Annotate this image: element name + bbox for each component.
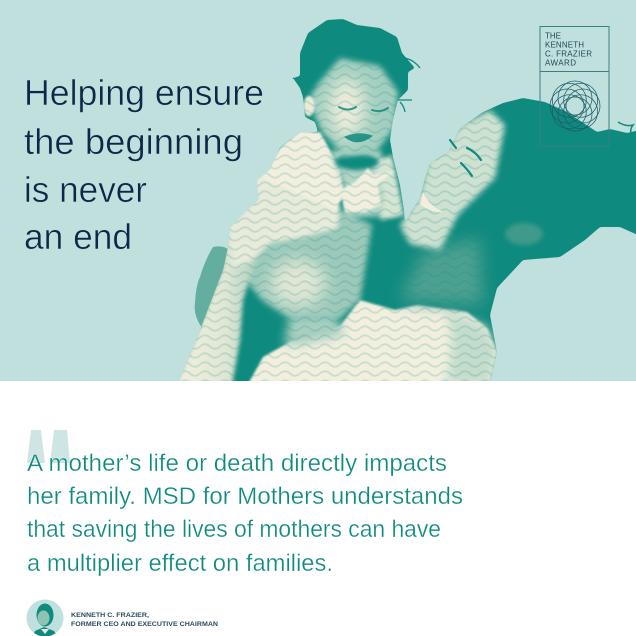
mother's face bbox=[400, 110, 505, 250]
baby's face bbox=[308, 58, 398, 156]
mother's smile and teeth bbox=[420, 192, 443, 212]
avatar background bbox=[26, 600, 64, 636]
wavy halftone texture bbox=[180, 45, 510, 385]
badge line 1: THE bbox=[545, 32, 561, 40]
title line 3: is never bbox=[24, 169, 147, 210]
award badge bbox=[540, 26, 609, 146]
baby's hair strands bbox=[293, 58, 420, 112]
baby's shirt bbox=[262, 131, 345, 210]
icon: spirograph ring bbox=[550, 81, 600, 131]
baby's shirt middle bbox=[330, 150, 398, 218]
baby's sleeve and upper arm bbox=[228, 168, 340, 268]
baby's neck shadow bbox=[335, 154, 379, 170]
baby's shirt right side bbox=[372, 155, 404, 220]
mother and baby figures bbox=[170, 0, 636, 385]
title line 2: the beginning bbox=[24, 121, 243, 162]
attribution role: FORMER CEO AND EXECUTIVE CHAIRMAN bbox=[71, 621, 218, 628]
baby's ear bbox=[304, 96, 314, 116]
quote line 2: her family. MSD for Mothers understands bbox=[27, 483, 463, 510]
title line 1: Helping ensure bbox=[24, 72, 264, 113]
hero background panel bbox=[0, 0, 636, 381]
mother's neck bbox=[400, 238, 483, 305]
avatar head bbox=[36, 604, 54, 626]
mother's chest bbox=[248, 300, 497, 384]
baby's leg behind mother's arm bbox=[195, 246, 228, 328]
badge text bbox=[545, 32, 592, 68]
quote line 4: a multiplier effect on families. bbox=[27, 550, 333, 577]
mother's chest right shading bbox=[445, 312, 497, 384]
mother's raised arm bbox=[179, 226, 260, 381]
silhouette fill bbox=[170, 0, 636, 385]
quote line 3: that saving the lives of mothers can have bbox=[27, 516, 441, 543]
baby's face highlight bbox=[329, 78, 365, 138]
badge line 4: AWARD bbox=[545, 58, 576, 68]
baby's thigh bbox=[284, 314, 345, 345]
badge line 2: KENNETH bbox=[545, 40, 584, 50]
quote line 1: A mother’s life or death directly impacts bbox=[27, 450, 447, 477]
mother's eyes and brow bbox=[450, 140, 481, 176]
quote mark bbox=[27, 430, 70, 463]
badge line 3: C. FRAZIER bbox=[545, 50, 592, 58]
attribution bbox=[71, 612, 218, 628]
avatar shirt bbox=[41, 629, 49, 634]
portrait avatar bbox=[26, 600, 64, 636]
attribution name: KENNETH C. FRAZIER, bbox=[71, 612, 149, 619]
title line 4: an end bbox=[24, 216, 132, 257]
baby's body mid tone bbox=[240, 200, 372, 318]
avatar shoulders bbox=[34, 627, 56, 636]
quote text bbox=[27, 450, 463, 577]
photo: mother lifting laughing baby bbox=[170, 0, 636, 385]
baby's hand bbox=[340, 168, 395, 212]
avatar face highlight bbox=[38, 610, 50, 626]
baby's belly highlight bbox=[270, 259, 326, 307]
baby's eyes and smile bbox=[339, 107, 388, 142]
badge frame bbox=[540, 26, 609, 146]
mother's ear bbox=[505, 223, 543, 245]
title bbox=[24, 72, 264, 257]
mother's hair strand bbox=[618, 122, 633, 136]
